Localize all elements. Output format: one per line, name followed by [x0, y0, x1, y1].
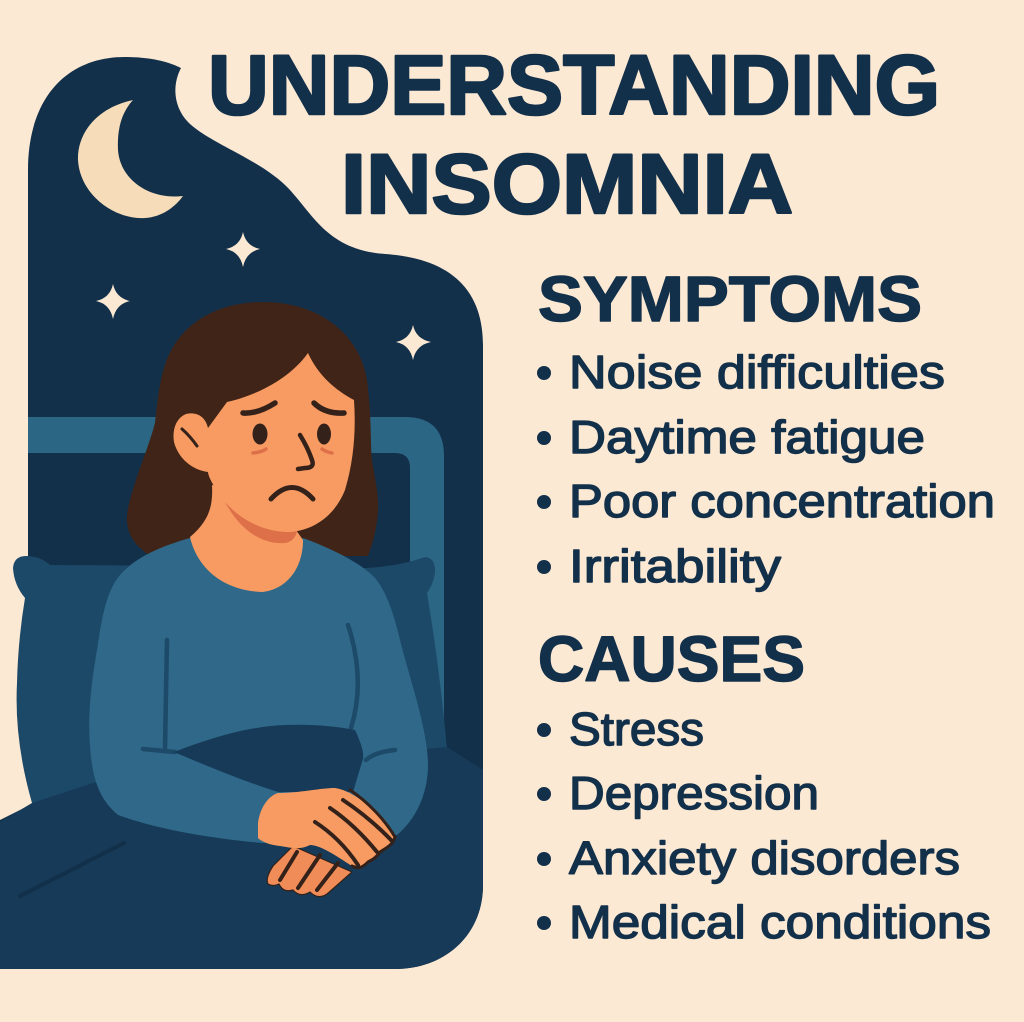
- character: woman in bed: [89, 302, 428, 897]
- lower finger lines: [280, 852, 338, 890]
- neck: [190, 485, 303, 592]
- left pillow: [13, 556, 200, 803]
- blanket: [0, 747, 483, 969]
- ear: [174, 413, 215, 472]
- symptom list: [537, 346, 995, 592]
- causes list: Depression: [569, 767, 819, 819]
- sweater fold lines: [143, 625, 395, 760]
- nose: [298, 435, 313, 469]
- icon: crescent moon: [78, 100, 183, 218]
- heading: symptoms: SYMPTOMS: [538, 263, 922, 335]
- neck shadow: [225, 502, 297, 543]
- eyebrows: [243, 403, 344, 413]
- upper hand: [258, 788, 394, 867]
- blanket fold line: [20, 843, 124, 896]
- upper finger lines: [315, 800, 392, 865]
- lower hand: [267, 846, 352, 897]
- symptom list: Daytime fatigue: [569, 411, 925, 463]
- panel: night bedroom illustration: [0, 57, 483, 969]
- title: [208, 38, 940, 231]
- heading: causes: CAUSES: [538, 623, 805, 695]
- face: [208, 353, 355, 532]
- title: UNDERSTANDING: [208, 38, 940, 132]
- bed headboard rail: [28, 417, 444, 760]
- causes list: Stress: [569, 703, 704, 755]
- title: INSOMNIA: [341, 137, 793, 231]
- eyes: [252, 424, 331, 444]
- ear line: [182, 429, 197, 446]
- icon: star top: [226, 232, 260, 267]
- sweater: [89, 538, 428, 843]
- frowning mouth: [271, 488, 313, 499]
- symptom list: Poor concentration: [569, 475, 995, 527]
- panel: symptoms: [537, 263, 995, 592]
- right pillow: [300, 557, 447, 790]
- upper hand dark edge: [350, 790, 395, 868]
- causes list: Medical conditions: [569, 896, 991, 948]
- causes list: [537, 703, 991, 948]
- icon: star right: [396, 325, 431, 360]
- icon: star left: [96, 284, 130, 319]
- night sky panel: [0, 57, 483, 969]
- symptom list: Irritability: [569, 540, 781, 592]
- hair: [127, 302, 378, 556]
- under-eye marks: [253, 449, 332, 453]
- causes list: Anxiety disorders: [569, 832, 960, 884]
- lap blanket: [174, 725, 363, 792]
- panel: causes: [537, 623, 991, 948]
- symptom list: Noise difficulties: [569, 346, 945, 398]
